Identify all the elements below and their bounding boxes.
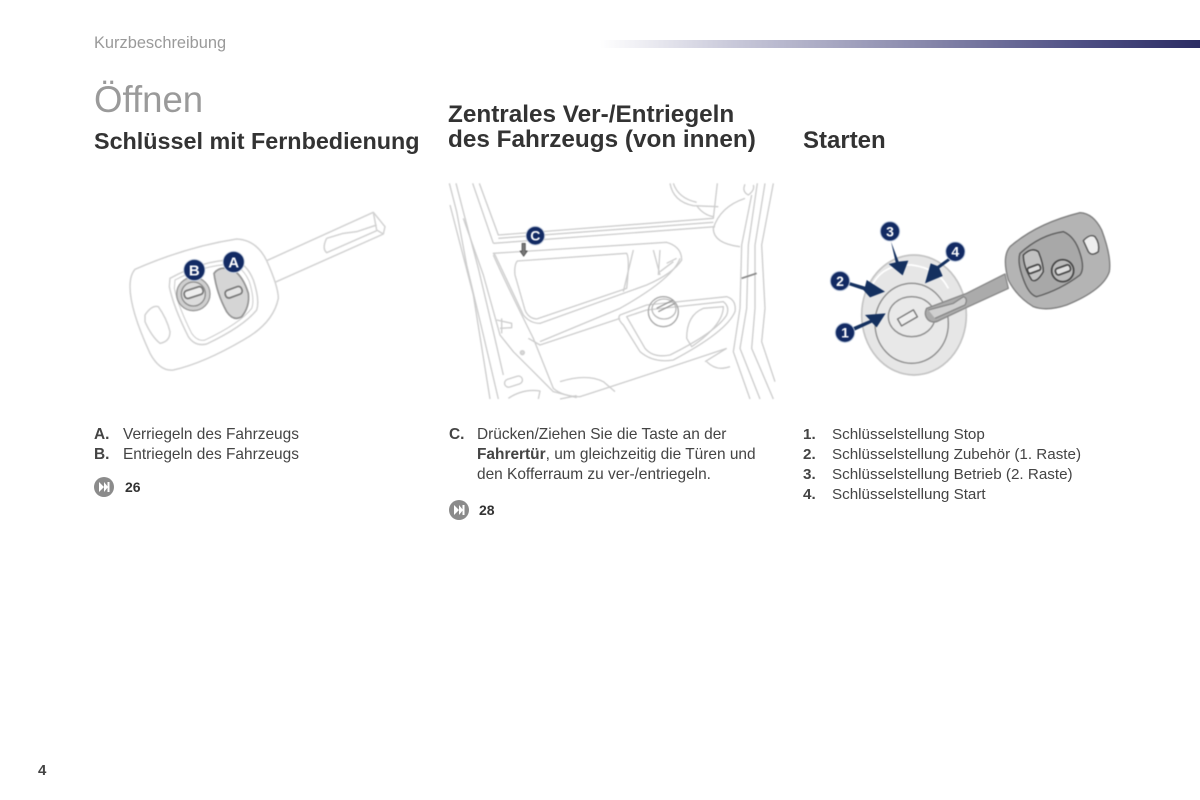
text block: door button: Fahrertür, um gleichzeitig die Türen und [477,446,756,463]
callout 2 [830,271,850,291]
callout 3: 3 [886,223,894,239]
button A [214,268,249,318]
callout 4: 4 [951,244,959,260]
position arrow 3 [889,242,908,275]
page reference 28 [449,500,495,520]
text block: key buttons [94,426,299,463]
text block: key positions: Schlüsselstellung Stop [832,426,985,443]
text block: key buttons: A. [94,426,109,443]
text block: key buttons: Entriegeln des Fahrzeugs [123,446,299,463]
callout 1: 1 [841,325,849,341]
text block: key positions [803,426,1081,503]
text block: key positions: Schlüsselstellung Start [832,486,986,503]
position arrow 2 [845,280,885,297]
key head [1005,213,1110,309]
position arrow 4 [925,257,951,283]
text block: key positions: 2. [803,446,816,463]
callout 2: 2 [836,273,844,289]
text block: key positions: 1. [803,426,816,443]
text block: key positions: 4. [803,486,816,503]
callout 4 [946,242,965,261]
button C switch [520,243,527,256]
text block: door button: Drücken/Ziehen Sie die Taste an der [477,426,726,443]
text block: key positions: Schlüsselstellung Betrieb (2. Raste) [832,466,1073,483]
page reference 28: 28 [479,502,495,518]
callout B: B [189,262,200,279]
text block: key buttons: B. [94,446,109,463]
page reference 26: 26 [125,479,141,495]
page reference 26 [94,477,141,497]
title: Öffnen [94,79,203,120]
illustration: door interior with button C [448,183,776,400]
text block: door button: den Kofferraum zu ver-/entriegeln. [477,466,711,483]
key blade [925,274,1008,322]
callout C [526,226,545,245]
heading: starting: Starten [803,127,886,154]
heading: central locking [448,101,756,153]
callout C: C [530,228,540,244]
illustration: ignition lock and key with positions 1-4 [829,211,1112,376]
text block: door button [449,426,756,483]
text block: key positions: 3. [803,466,816,483]
page number: 4 [38,762,46,779]
callout A [223,251,244,273]
callout 3 [880,222,900,241]
text block: door button: C. [449,426,464,443]
heading: central locking: Zentrales Ver-/Entriegeln [448,101,734,128]
position arrow 1 [853,313,886,331]
text block: key buttons: Verriegeln des Fahrzeugs [123,426,299,443]
callout 1 [835,323,855,342]
button B [177,277,210,311]
header gradient bar [600,40,1200,48]
callout A: A [228,254,239,271]
text block: key positions: Schlüsselstellung Zubehör (1. Raste) [832,446,1081,463]
callout B [184,259,205,281]
heading: key with remote: Schlüssel mit Fernbedienung [94,128,420,154]
section header label: Kurzbeschreibung [94,34,226,52]
illustration: remote key with buttons A and B [128,211,386,372]
heading: central locking: des Fahrzeugs (von innen) [448,126,756,153]
